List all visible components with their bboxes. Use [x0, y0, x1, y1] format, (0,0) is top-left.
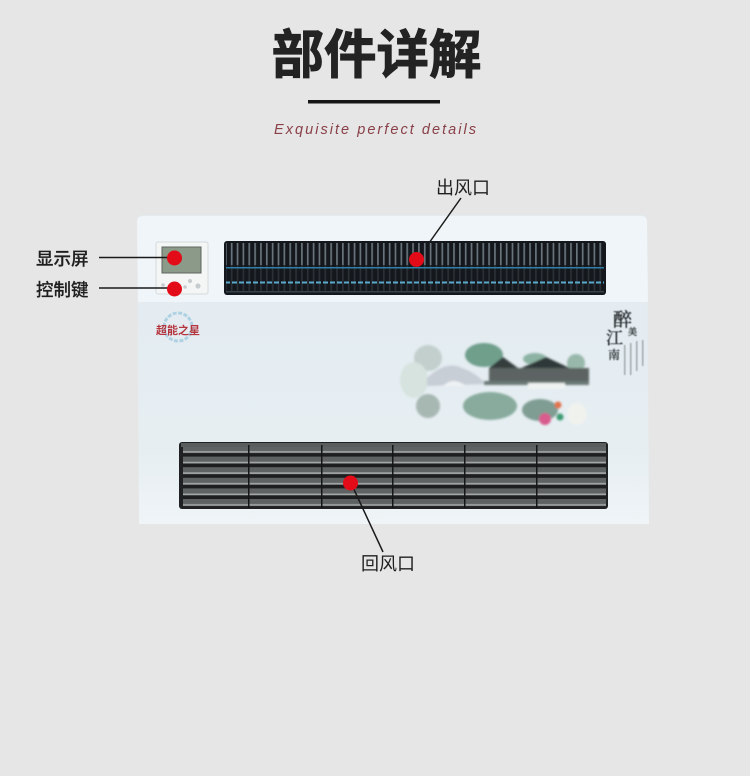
painting calligraphy: 江	[606, 324, 623, 349]
air outlet grille	[224, 241, 606, 295]
unit top band	[137, 216, 648, 302]
callout: display: 显示屏	[36, 249, 88, 269]
control buttons	[161, 279, 201, 289]
callout: air outlet: 出风口	[436, 178, 490, 198]
return air grille	[179, 442, 608, 509]
callout: display	[36, 249, 182, 269]
unit body	[137, 215, 649, 524]
callout: return air	[343, 476, 415, 574]
title: 部件详解	[271, 26, 482, 85]
panel: fan coil unit	[137, 215, 649, 524]
callout: air outlet	[409, 178, 490, 267]
painting calligraphy: 醉	[613, 305, 633, 332]
painting calligraphy: 美	[628, 325, 637, 338]
LCD display	[162, 247, 201, 273]
subtitle: Exquisite perfect details	[274, 122, 476, 138]
control panel	[156, 242, 208, 294]
callout: return air: 回风口	[361, 554, 415, 574]
landscape painting	[400, 343, 589, 425]
painting calligraphy: 南	[608, 346, 620, 363]
title underline	[308, 100, 440, 104]
painting calligraphy	[606, 305, 644, 375]
brand logo	[156, 313, 200, 341]
callout: control keys	[36, 280, 182, 300]
callout: control keys: 控制键	[36, 280, 88, 300]
brand logo: 超能之星	[156, 323, 200, 337]
